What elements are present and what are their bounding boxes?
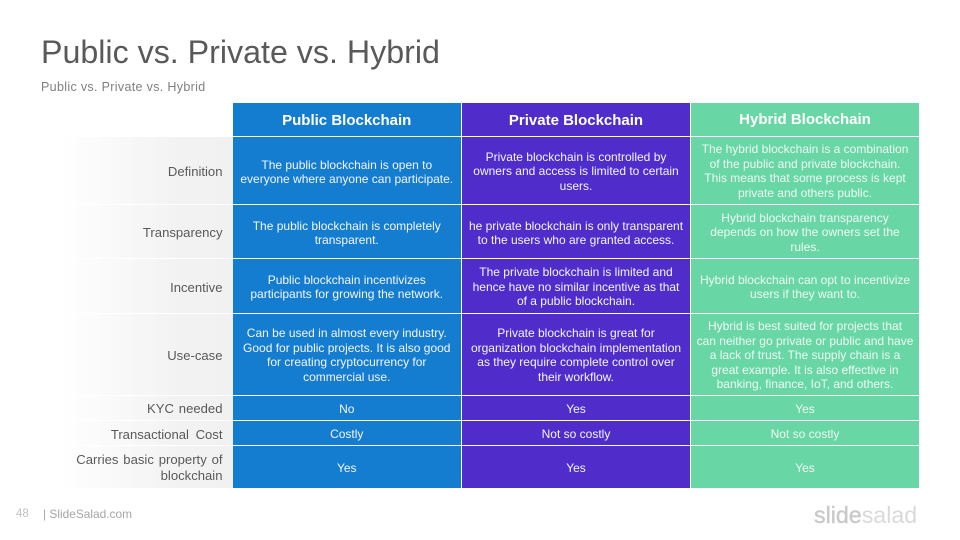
private definition <box>462 137 690 204</box>
private cost <box>462 421 690 445</box>
subtitle: Public vs. Private vs. Hybrid <box>41 80 205 94</box>
public cost: Costly <box>330 427 363 441</box>
row label: transparency <box>60 204 232 258</box>
hybrid incentive: users if they want to. <box>750 287 860 301</box>
row label: basic property <box>60 446 232 488</box>
public definition: The public blockchain is open to <box>261 158 432 172</box>
column header: hybrid <box>691 103 919 136</box>
public KYC <box>232 396 461 420</box>
row label: transactional cost <box>60 421 232 445</box>
private incentive <box>462 259 690 313</box>
hybrid definition: of the public and private blockchain. <box>710 157 900 171</box>
logo: slidesalad: slidesalad <box>814 502 917 528</box>
hybrid definition: private and others public. <box>738 186 872 200</box>
public transparency <box>232 204 461 258</box>
private KYC: Yes <box>566 402 586 416</box>
private use-case: organization blockchain implementation <box>471 341 681 355</box>
hybrid use-case: banking, finance, IoT, and others. <box>717 377 893 391</box>
private KYC <box>462 396 690 420</box>
hybrid transparency: depends on how the owners set the <box>710 225 900 239</box>
private transparency <box>462 204 690 258</box>
footer site: | SlideSalad.com <box>43 507 132 521</box>
private use-case: Private blockchain is great for <box>497 326 655 340</box>
public definition <box>232 137 461 204</box>
row label: definition: Definition <box>168 164 222 179</box>
private use-case: as they require complete control over <box>477 355 675 369</box>
hybrid use-case: can neither go private or public and have <box>697 334 913 348</box>
column header: public <box>232 103 461 136</box>
private transparency: to the users who are granted access. <box>478 233 674 247</box>
hybrid definition <box>691 137 919 204</box>
row label: incentive: Incentive <box>170 280 222 294</box>
hybrid transparency: Hybrid blockchain transparency <box>721 210 889 224</box>
row label: transparency: Transparency <box>143 225 222 240</box>
public use-case: commercial use. <box>303 370 390 384</box>
public definition: everyone where anyone can participate. <box>240 172 453 186</box>
private definition: owners and access is limited to certain <box>473 164 679 178</box>
row label: definition <box>60 137 232 204</box>
row label: use-case: Use-case <box>167 348 222 363</box>
private incentive: hence have no similar incentive as that <box>473 280 679 294</box>
private definition: users. <box>560 178 592 192</box>
row label: incentive <box>60 259 232 313</box>
public transparency: transparent. <box>315 233 379 247</box>
private use-case <box>462 314 690 394</box>
hybrid transparency: rules. <box>790 240 820 254</box>
public incentive <box>232 259 461 313</box>
hybrid use-case <box>691 314 919 394</box>
private cost: Not so costly <box>542 427 610 441</box>
private basic property: Yes <box>566 460 586 474</box>
row label: KYC needed <box>60 396 232 420</box>
hybrid basic property <box>691 446 919 488</box>
public use-case: for creating cryptocurrency for <box>267 355 426 369</box>
private basic property <box>462 446 690 488</box>
hybrid cost <box>691 421 919 445</box>
hybrid definition: This means that some process is kept <box>704 171 906 185</box>
row label: basic property: Carries basic property of <box>76 452 222 467</box>
public use-case <box>232 314 461 394</box>
hybrid use-case: a lack of trust. The supply chain is a <box>710 348 900 362</box>
hybrid use-case: Hybrid is best suited for projects that <box>708 319 902 333</box>
public basic property <box>232 446 461 488</box>
hybrid KYC: Yes <box>795 402 815 416</box>
comparison table <box>76 103 919 488</box>
row label: transactional cost: Transactional Cost <box>111 426 222 442</box>
public use-case: Can be used in almost every industry. <box>247 326 447 340</box>
title: Public vs. Private vs. Hybrid <box>41 34 440 70</box>
public KYC: No <box>339 402 354 416</box>
hybrid use-case: great example. It is also effective in <box>711 362 899 376</box>
private incentive: The private blockchain is limited and <box>479 265 673 279</box>
hybrid cost: Not so costly <box>771 427 839 441</box>
hybrid KYC <box>691 396 919 420</box>
hybrid definition: The hybrid blockchain is a combination <box>702 142 908 156</box>
hybrid incentive: Hybrid blockchain can opt to incentivize <box>700 272 910 286</box>
public incentive: Public blockchain incentivizes <box>268 272 426 286</box>
row label: use-case <box>60 314 232 394</box>
column header: private <box>462 103 690 136</box>
page number: 48 <box>16 508 29 520</box>
private definition: Private blockchain is controlled by <box>486 150 666 164</box>
private use-case: their workflow. <box>538 370 614 384</box>
column header: public: Public Blockchain <box>282 112 411 129</box>
hybrid basic property: Yes <box>795 460 815 474</box>
public use-case: Good for public projects. It is also good <box>243 341 450 355</box>
public transparency: The public blockchain is completely <box>253 219 441 233</box>
public cost <box>232 421 461 445</box>
public incentive: participants for growing the network. <box>250 287 443 301</box>
hybrid transparency <box>691 204 919 258</box>
hybrid incentive <box>691 259 919 313</box>
row label: basic property: blockchain <box>161 468 222 483</box>
column header: private: Private Blockchain <box>509 112 643 129</box>
public basic property: Yes <box>337 460 357 474</box>
row label: KYC needed: KYC needed <box>147 401 222 416</box>
private incentive: of a public blockchain. <box>517 294 635 308</box>
column header: hybrid: Hybrid Blockchain <box>739 111 871 128</box>
private transparency: he private blockchain is only transparent <box>469 219 683 233</box>
